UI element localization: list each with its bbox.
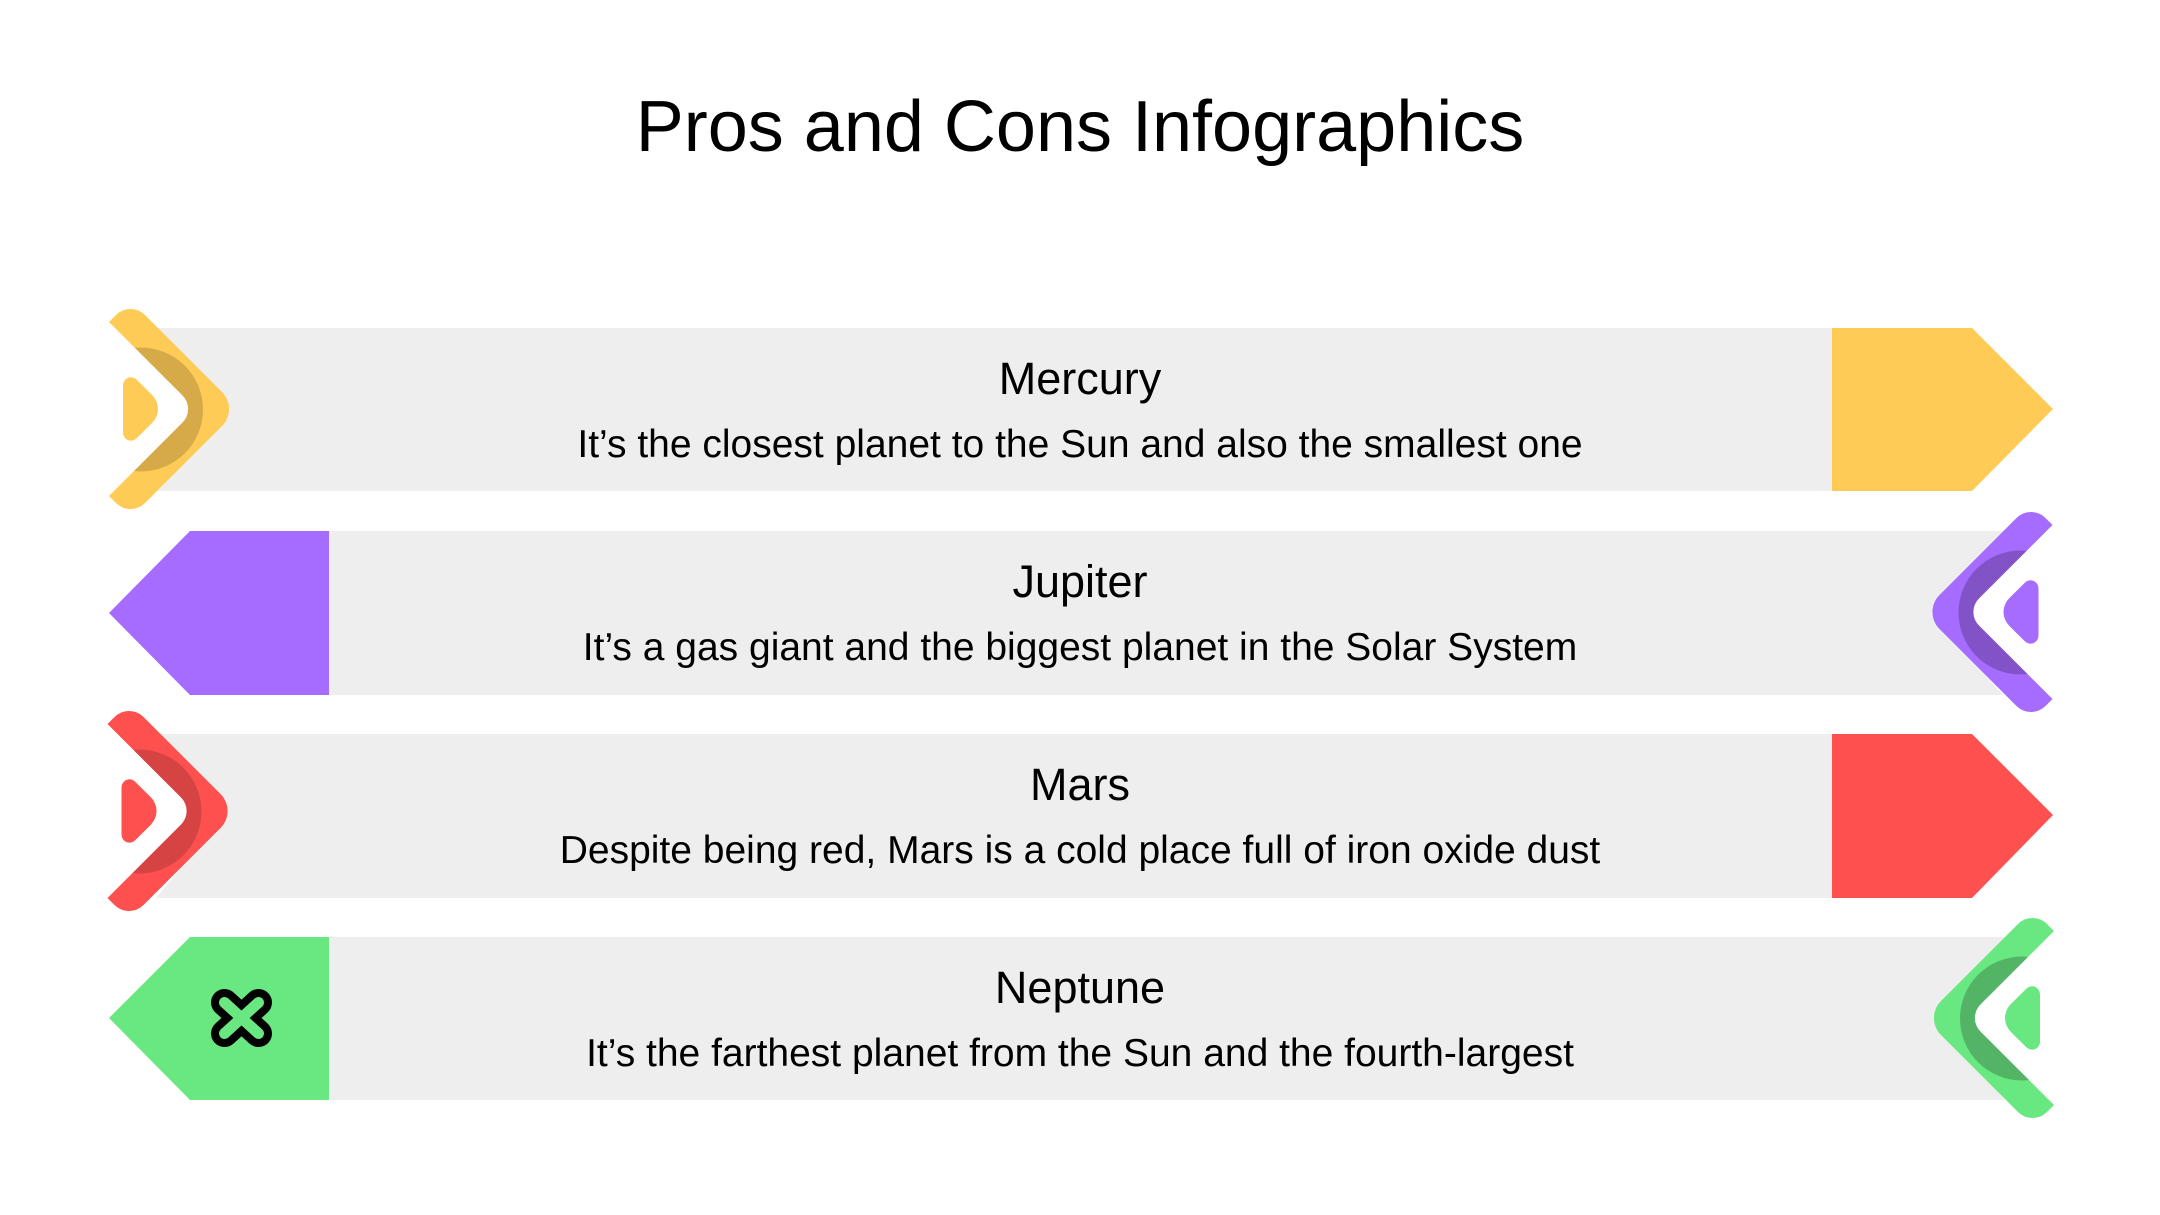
heading: Mercury: Mercury [999, 353, 1162, 404]
icon: Jupiter chevron [1932, 512, 2052, 712]
icon: Neptune X mark [224, 1002, 258, 1034]
text: Mercury description: It’s the closest planet to the Sun and also the smallest one [577, 423, 1583, 466]
text: Mars description: Despite being red, Mars is a cold place full of iron oxide dust [560, 829, 1600, 872]
bar: Mars background [156, 734, 1832, 898]
arrow: Neptune left pentagon [109, 937, 329, 1100]
title: Pros and Cons Infographics [636, 87, 1524, 167]
heading: Neptune: Neptune [995, 962, 1165, 1013]
icon: Neptune chevron [1934, 918, 2054, 1118]
arrow: Mars right pentagon [1832, 734, 2053, 898]
panel: Mercury [79, 309, 2053, 509]
bar: Jupiter background [329, 531, 2003, 695]
heading: Jupiter: Jupiter [1012, 556, 1148, 607]
heading: Mars: Mars [1030, 759, 1130, 810]
icon: Mars chevron [108, 711, 228, 911]
panel: Mars [78, 711, 2053, 911]
bar: Mercury background [158, 328, 1832, 491]
arrow: Mercury right pentagon [1832, 328, 2053, 491]
icon: Mercury chevron [109, 309, 230, 509]
panel: Jupiter [109, 512, 2082, 712]
text: Neptune description: It’s the farthest planet from the Sun and the fourth-largest [586, 1032, 1574, 1075]
arrow: Jupiter left pentagon [109, 531, 329, 695]
panel: Neptune [109, 918, 2084, 1118]
bar: Neptune background [329, 937, 2005, 1100]
text: Jupiter description: It’s a gas giant and the biggest planet in the Solar System [583, 626, 1577, 669]
